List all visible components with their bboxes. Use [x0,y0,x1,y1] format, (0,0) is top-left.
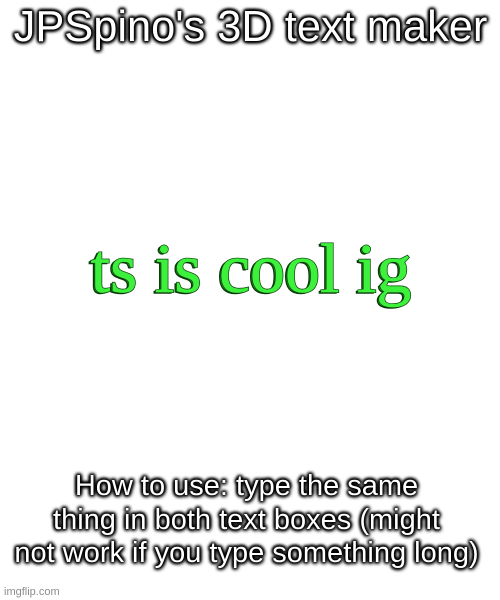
instructions text [12,470,482,573]
title: JPSpino's 3D text maker [14,3,487,51]
3D text: ts is cool ig [91,231,411,308]
3D text: ts is cool ig [91,231,411,308]
instructions text: How to use: type the same [75,470,418,502]
instructions text: thing in both text boxes (might [53,504,440,536]
imgflip watermark: imgflip.com [4,586,60,598]
instructions text: not work if you type something long) [14,537,479,569]
3D text: ts is cool ig [89,232,409,309]
